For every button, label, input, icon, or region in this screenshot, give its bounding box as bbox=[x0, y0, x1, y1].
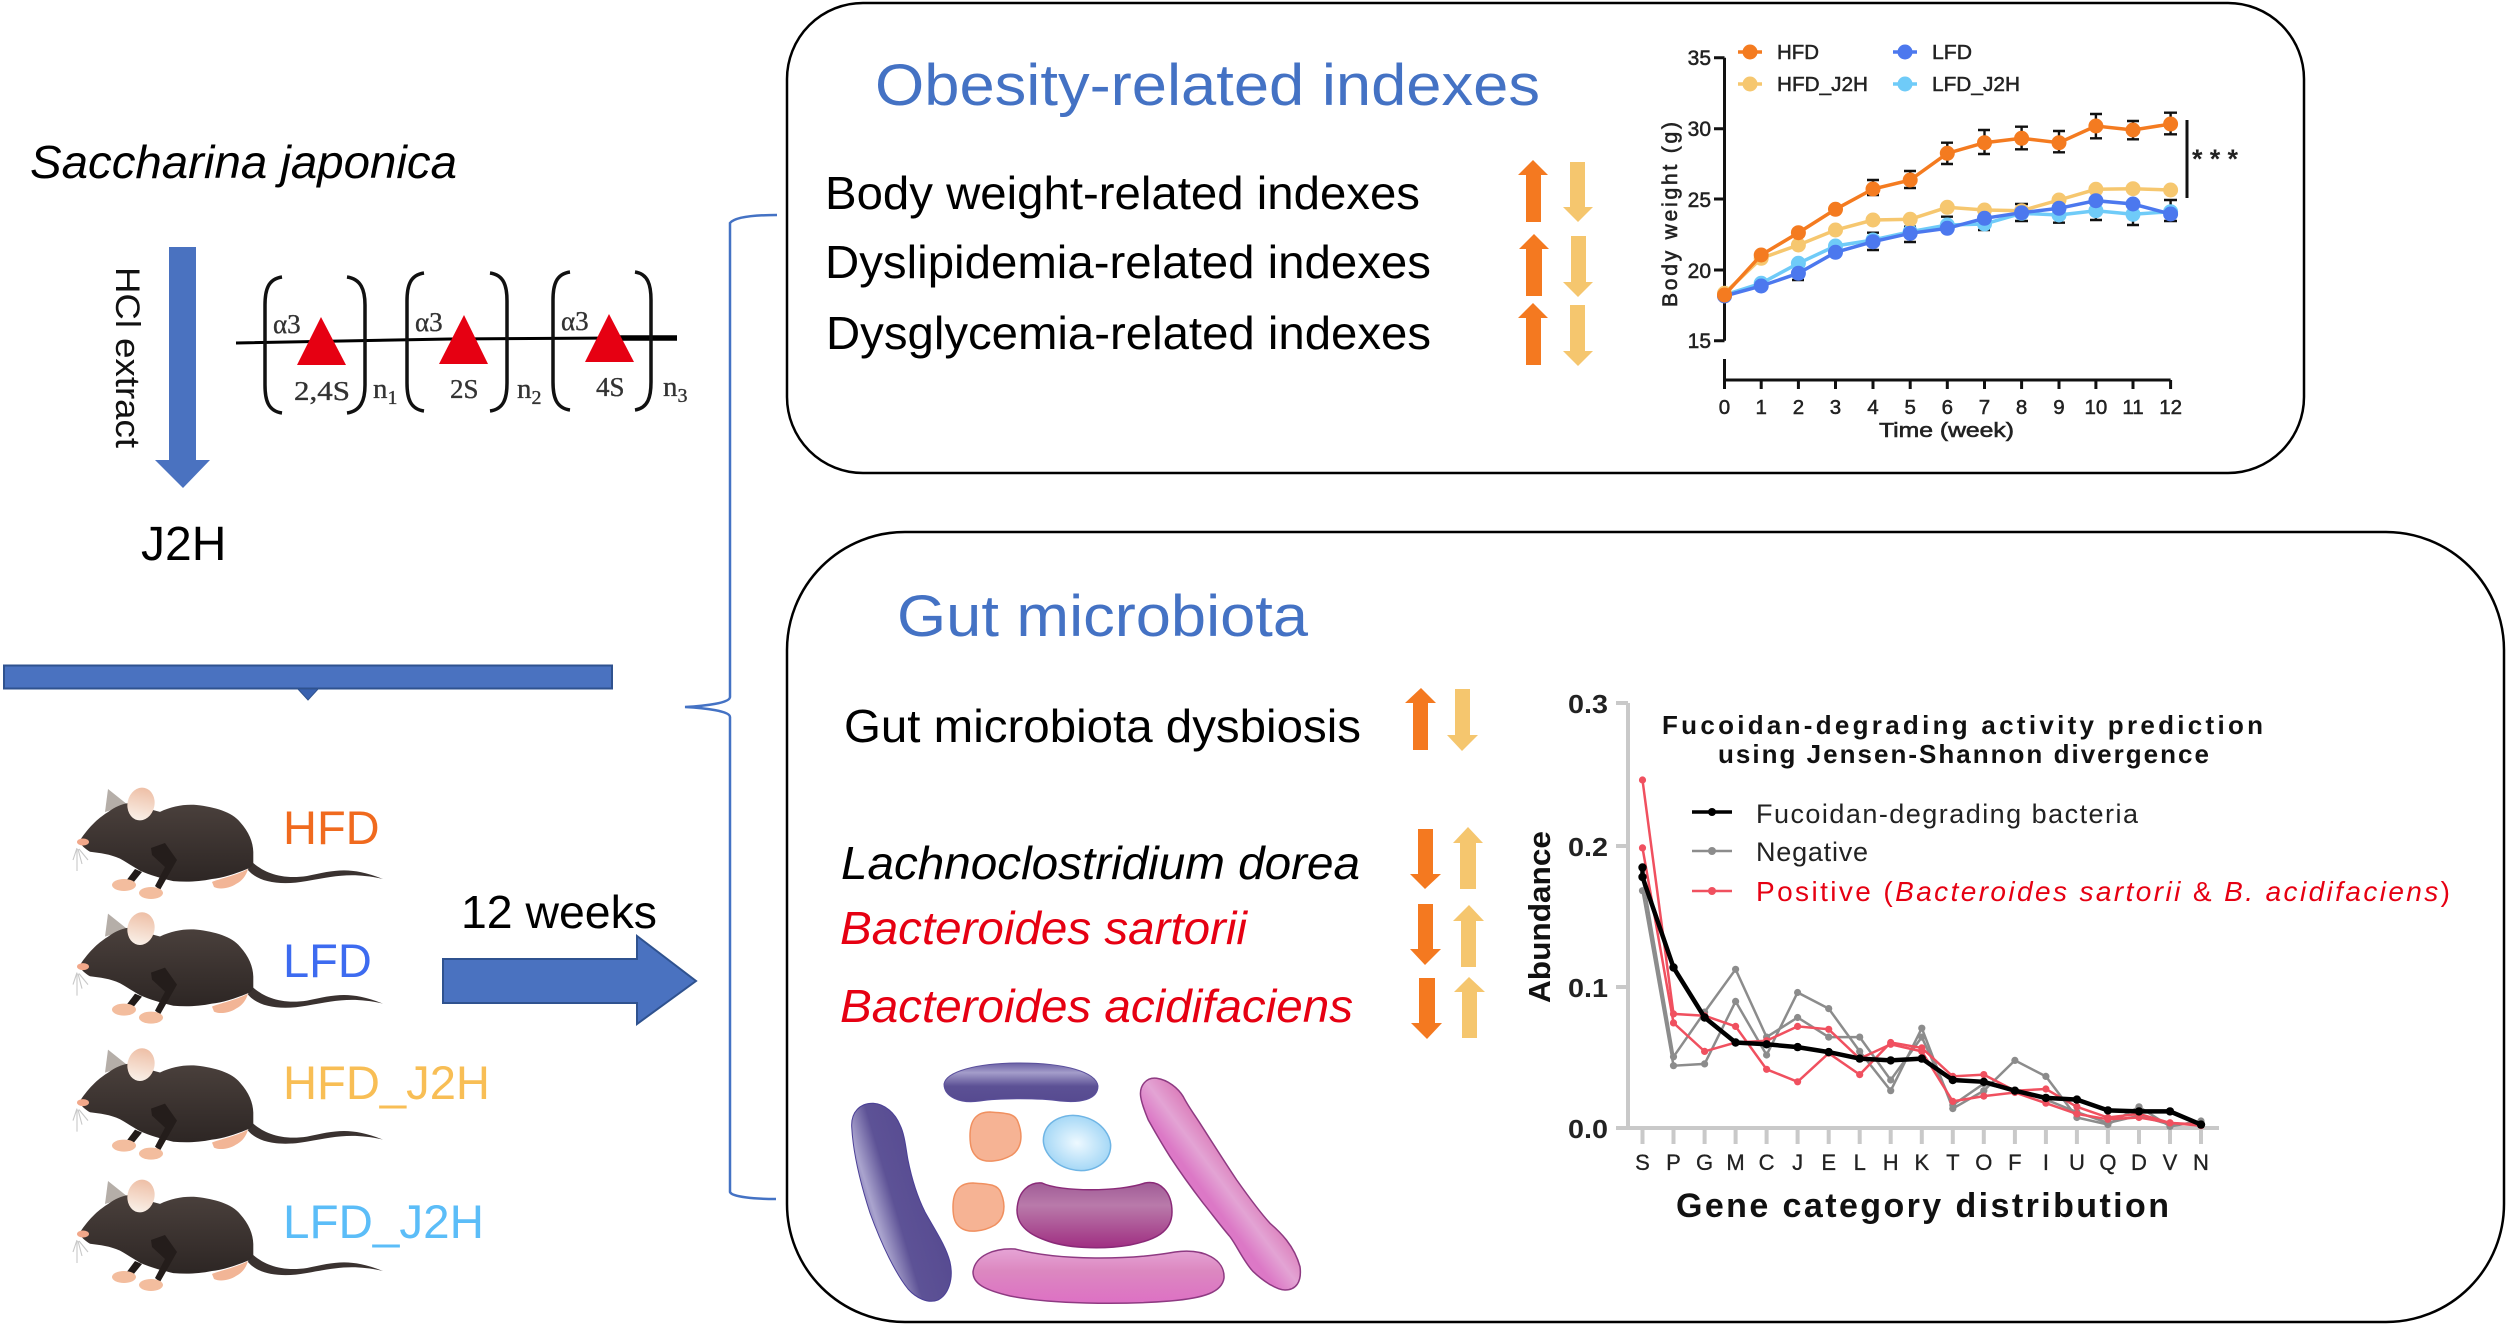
heading: gut microbiota: Gut microbiota bbox=[897, 584, 1309, 649]
y tick labels: 35 bbox=[1688, 47, 1711, 70]
y tick labels: 25 bbox=[1688, 189, 1711, 212]
chart title: Fucoidan-degrading activity prediction bbox=[1662, 710, 2263, 740]
chart title bbox=[1662, 710, 2263, 769]
fucoidan structure diagram: α3 bbox=[561, 306, 589, 336]
series: positive Bacteroides sartorii bbox=[1642, 780, 2201, 1125]
series: LFD_J2H bbox=[1724, 211, 2171, 295]
axes bbox=[1714, 58, 2171, 389]
chart legend bbox=[1692, 799, 2450, 907]
fucoidan structure diagram: n bbox=[663, 371, 678, 403]
series: negative sample 1 bbox=[1642, 891, 2201, 1126]
horizontal divider arrow bbox=[4, 666, 612, 700]
series: fucoidan-degrading bacteria bbox=[1642, 868, 2201, 1125]
bracket linking treatment to outcomes bbox=[685, 215, 777, 1199]
line chart: body weight over time bbox=[1659, 41, 2238, 442]
y tick labels: 0.2 bbox=[1568, 832, 1608, 862]
chart title: using Jensen-Shannon divergence bbox=[1718, 739, 2209, 769]
category labels: V bbox=[2163, 1150, 2178, 1175]
fucoidan structure diagram: 2 bbox=[532, 387, 542, 409]
category labels: U bbox=[2069, 1150, 2085, 1175]
y tick labels: 0.0 bbox=[1568, 1114, 1608, 1144]
x tick labels: 8 bbox=[2016, 396, 2027, 419]
category labels: N bbox=[2193, 1150, 2209, 1175]
x tick labels: 3 bbox=[1830, 396, 1841, 419]
x axis title: Gene category distribution bbox=[1676, 1187, 2169, 1225]
arrows: dysbiosis bbox=[1405, 688, 1478, 751]
category labels: S bbox=[1635, 1150, 1650, 1175]
chart legend: LFD bbox=[1932, 41, 1972, 64]
y tick labels: 20 bbox=[1688, 260, 1711, 283]
x tick labels: 12 bbox=[2159, 396, 2182, 419]
x tick labels: 11 bbox=[2122, 396, 2144, 419]
arrows: dyslipidemia up and down bbox=[1519, 234, 1593, 297]
y tick labels bbox=[1688, 47, 1711, 353]
category labels: K bbox=[1914, 1150, 1929, 1175]
x tick labels: 10 bbox=[2084, 396, 2107, 419]
category labels: Q bbox=[2099, 1150, 2116, 1175]
label: HFD_J2H: HFD_J2H bbox=[283, 1056, 490, 1109]
heading: obesity-related indexes: Obesity-related indexes bbox=[875, 53, 1540, 118]
label: HCl extract: HCl extract bbox=[108, 267, 146, 449]
text: dysglycemia-related indexes: Dysglycemia-related indexes bbox=[826, 307, 1431, 359]
chart legend: HFD_J2H bbox=[1777, 73, 1868, 96]
series: negative sample 2 bbox=[1642, 876, 2201, 1125]
bacterium: bottom pink rod bbox=[973, 1249, 1224, 1303]
fucoidan structure diagram: 1 bbox=[388, 387, 398, 409]
arrows: Lachnoclostridium dorea bbox=[1410, 827, 1483, 889]
panel: gut microbiota bbox=[787, 532, 2504, 1322]
category labels: C bbox=[1759, 1150, 1775, 1175]
category labels: O bbox=[1975, 1150, 1992, 1175]
mouse: LFD group bbox=[73, 910, 383, 1024]
series: HFD bbox=[1724, 124, 2171, 295]
x tick labels: 1 bbox=[1755, 396, 1767, 419]
series: positive Bacteroides acidifaciens bbox=[1642, 848, 2201, 1126]
error bars bbox=[1792, 113, 2177, 280]
label: LFD_J2H: LFD_J2H bbox=[283, 1195, 484, 1248]
label: HFD: HFD bbox=[283, 801, 380, 854]
bacterium: left purple rod bbox=[852, 1103, 951, 1301]
category labels: D bbox=[2131, 1150, 2147, 1175]
text: Lachnoclostridium dorea: Lachnoclostridium dorea bbox=[841, 837, 1360, 889]
x tick labels: 5 bbox=[1904, 396, 1916, 419]
label: LFD: LFD bbox=[283, 934, 372, 987]
x tick labels: 4 bbox=[1867, 396, 1879, 419]
fucoidan structure diagram bbox=[236, 272, 688, 413]
bacterium: lower orange coccus bbox=[953, 1183, 1004, 1231]
bacterium: top purple rod bbox=[944, 1063, 1098, 1102]
text: body weight-related indexes: Body weight-related indexes bbox=[825, 167, 1420, 219]
fucoidan structure diagram: n bbox=[517, 373, 532, 405]
chart legend: HFD bbox=[1777, 41, 1819, 64]
mouse: HFD group bbox=[73, 785, 383, 899]
chart legend: Positive (Bacteroides sartorii & B. acidifaciens) bbox=[1756, 876, 2450, 907]
significance marker bbox=[2187, 120, 2238, 198]
bacterium: maroon kidney bbox=[1017, 1183, 1172, 1248]
line chart: gene category distribution bbox=[1522, 689, 2450, 1225]
y axis title: Abundance bbox=[1522, 831, 1557, 1003]
category labels: E bbox=[1821, 1150, 1836, 1175]
fucoidan structure diagram: 2,4S bbox=[294, 376, 350, 406]
illustration: gut bacteria bbox=[852, 1063, 1300, 1303]
arrows: dysglycemia up and down bbox=[1518, 303, 1593, 366]
y axis title: Body weight (g) bbox=[1659, 122, 1682, 307]
y tick labels: 30 bbox=[1688, 118, 1711, 141]
text: Bacteroides sartorii: Bacteroides sartorii bbox=[840, 902, 1249, 954]
fucoidan structure diagram: α3 bbox=[273, 309, 301, 339]
category labels: J bbox=[1792, 1150, 1803, 1175]
fucoidan structure diagram: 2S bbox=[450, 374, 479, 404]
category labels: L bbox=[1854, 1150, 1866, 1175]
category labels: T bbox=[1946, 1150, 1960, 1175]
text: dyslipidemia-related indexes: Dyslipidemia-related indexes bbox=[825, 236, 1431, 288]
x tick labels: 6 bbox=[1942, 396, 1953, 419]
text: Bacteroides acidifaciens: Bacteroides acidifaciens bbox=[840, 980, 1353, 1032]
x axis title: Time (week) bbox=[1879, 419, 2014, 442]
chart legend: Negative bbox=[1756, 837, 1868, 867]
arrows: Bacteroides acidifaciens bbox=[1411, 977, 1485, 1039]
panel: obesity-related indexes bbox=[787, 3, 2304, 473]
category labels bbox=[1635, 1150, 2209, 1175]
axes bbox=[1616, 703, 2219, 1144]
label: 12 weeks: 12 weeks bbox=[461, 886, 657, 938]
bacterium: blue coccus bbox=[1037, 1108, 1117, 1178]
fucoidan structure diagram: 3 bbox=[678, 385, 688, 407]
category labels: M bbox=[1726, 1150, 1745, 1175]
arrows: body weight up and down bbox=[1518, 160, 1593, 222]
chart legend: LFD_J2H bbox=[1932, 73, 2020, 96]
mouse: HFD_J2H group bbox=[73, 1046, 383, 1160]
fucoidan structure diagram: α3 bbox=[415, 307, 443, 337]
y tick labels bbox=[1568, 689, 1608, 1144]
category labels: F bbox=[2008, 1150, 2022, 1175]
species name: Saccharina japonica: Saccharina japonica bbox=[30, 136, 457, 188]
x tick labels: 7 bbox=[1979, 396, 1990, 419]
category labels: G bbox=[1696, 1150, 1713, 1175]
x tick labels: 2 bbox=[1793, 396, 1804, 419]
x tick labels: 0 bbox=[1719, 396, 1730, 419]
category labels: H bbox=[1883, 1150, 1899, 1175]
x tick labels bbox=[1719, 396, 2182, 419]
y tick labels: 0.3 bbox=[1568, 689, 1608, 719]
label: J2H: J2H bbox=[141, 518, 226, 571]
series: LFD bbox=[1724, 201, 2171, 296]
mouse: LFD_J2H group bbox=[73, 1177, 383, 1291]
category labels: I bbox=[2043, 1150, 2049, 1175]
significance marker: *** bbox=[2192, 144, 2238, 174]
series: HFD_J2H bbox=[1724, 189, 2171, 293]
arrow: 12 weeks treatment bbox=[443, 936, 696, 1024]
arrows: Bacteroides sartorii bbox=[1410, 904, 1484, 967]
chart legend: Fucoidan-degrading bacteria bbox=[1756, 799, 2139, 829]
fucoidan structure diagram: 4S bbox=[596, 372, 625, 402]
bacterium: upper orange coccus bbox=[970, 1112, 1021, 1161]
y tick labels: 15 bbox=[1688, 330, 1711, 353]
chart legend bbox=[1738, 41, 2020, 96]
fucoidan structure diagram: n bbox=[373, 373, 388, 405]
category labels: P bbox=[1666, 1150, 1681, 1175]
x tick labels: 9 bbox=[2053, 396, 2065, 419]
text: gut microbiota dysbiosis: Gut microbiota dysbiosis bbox=[844, 700, 1361, 752]
y tick labels: 0.1 bbox=[1568, 973, 1608, 1003]
bacterium: right pink rod bbox=[1140, 1078, 1300, 1290]
arrow: HCl extraction bbox=[155, 247, 210, 488]
